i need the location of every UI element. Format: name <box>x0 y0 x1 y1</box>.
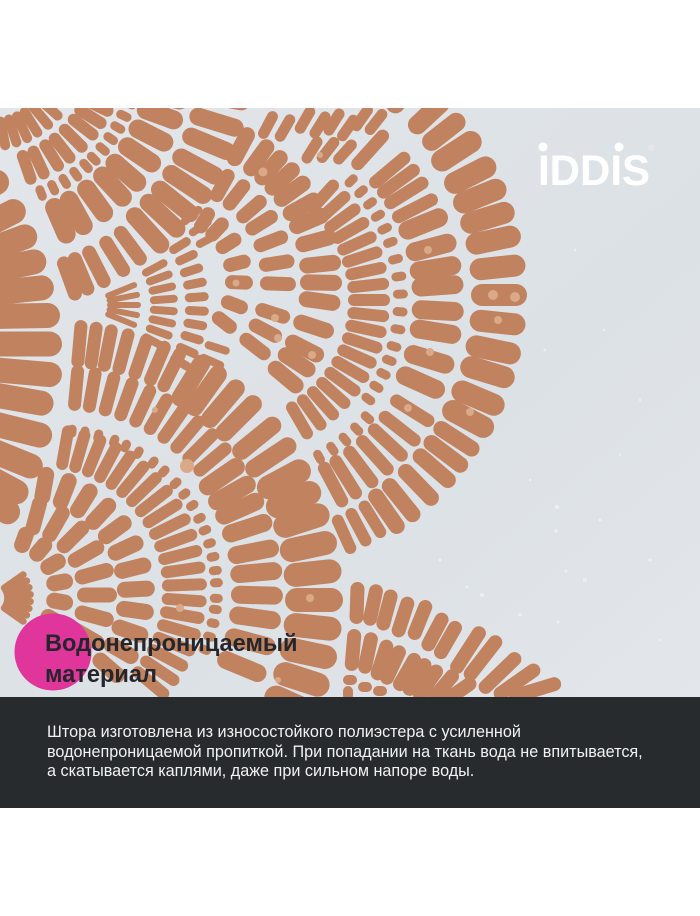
description text: водонепроницаемой пропиткой. При попадании на ткань вода не впитывается, <box>47 743 643 761</box>
pink circle accent <box>14 614 92 690</box>
description text: а скатывается каплями, даже при сильном напоре воды. <box>47 762 474 780</box>
description text <box>47 723 643 780</box>
heading: материал <box>45 662 157 688</box>
logo: IDDIS: IDDIS <box>538 147 650 195</box>
photo panel: fabric with petal pattern <box>0 108 700 808</box>
description text: Штора изготовлена из износостойкого полиэстера с усиленной <box>47 723 521 741</box>
water drops on the pattern <box>152 152 520 683</box>
water drops on the bare fabric <box>438 249 661 641</box>
heading: Водонепроницаемый <box>45 631 298 657</box>
dark text band <box>0 697 700 808</box>
heading <box>45 631 298 688</box>
logo: IDDIS: ® <box>648 143 655 153</box>
